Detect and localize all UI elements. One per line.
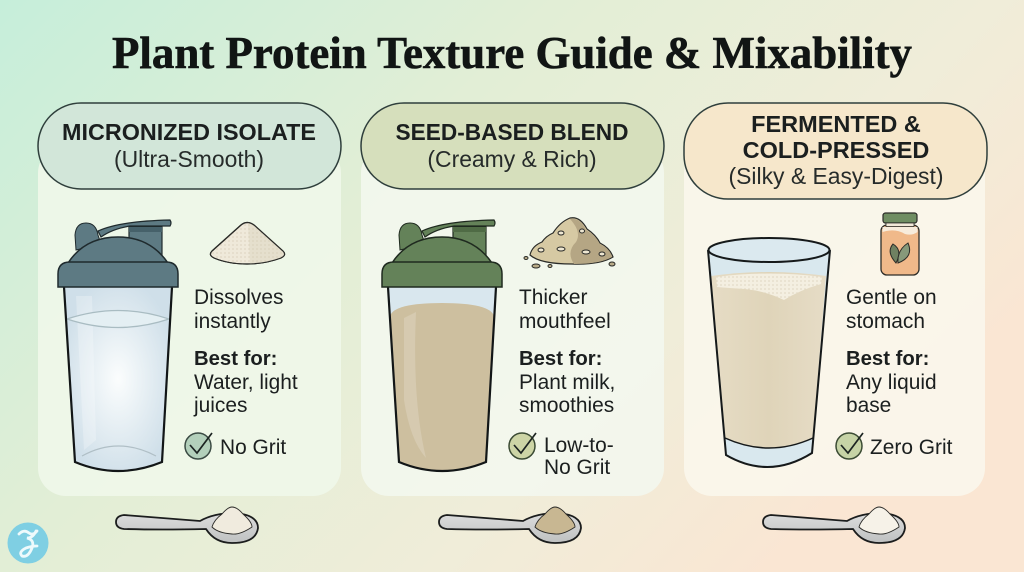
icon: fermented jar (881, 213, 919, 275)
heading pill: COLD-PRESSED (743, 137, 929, 163)
spoon: fine white powder (763, 507, 905, 543)
text: best for: Best for: (194, 348, 277, 370)
heading pill (38, 103, 341, 189)
text: dissolves instantly: Dissolves (194, 286, 283, 309)
text: gentle on stomach: stomach (846, 310, 925, 333)
icon: check badge (185, 433, 212, 459)
text: best for: Best for: (519, 348, 602, 370)
icon: check badge (509, 433, 536, 459)
heading pill (684, 103, 987, 199)
shaker bottle with plant milk (382, 220, 502, 471)
icon: white powder pile (210, 222, 285, 264)
spoon: tan powder (439, 507, 581, 543)
heading pill: FERMENTED & (751, 111, 921, 137)
shaker bottle with water (58, 220, 178, 471)
text: best for: Any liquid (846, 371, 937, 394)
text: low-to-no grit: Low-to- (544, 434, 614, 457)
panel background (361, 145, 664, 496)
panel: seed-based blend (361, 103, 664, 496)
text: best for: Best for: (846, 348, 929, 370)
text: best for: base (846, 394, 891, 417)
heading pill: SEED-BASED BLEND (396, 119, 628, 145)
heading pill: (Silky & Easy-Digest) (729, 163, 943, 189)
panel: fermented and cold-pressed (684, 103, 987, 496)
icon: check badge (836, 433, 863, 459)
text: no grit: No Grit (220, 436, 286, 459)
glass of silky shake (708, 238, 830, 467)
text: best for: smoothies (519, 394, 614, 417)
heading pill: (Ultra-Smooth) (114, 146, 264, 172)
panel background (684, 145, 985, 496)
text: best for: juices (193, 394, 247, 417)
text: thicker mouthfeel: Thicker (519, 286, 588, 309)
text: best for: Plant milk, (519, 371, 615, 394)
spoon: white powder (116, 507, 258, 543)
text: zero grit: Zero Grit (870, 436, 953, 459)
text: dissolves instantly: instantly (194, 310, 271, 333)
heading pill: (Creamy & Rich) (427, 146, 597, 172)
text: low-to-no grit: No Grit (544, 456, 610, 479)
text: best for: Water, light (194, 371, 298, 394)
heading pill (361, 103, 664, 189)
panel: micronized isolate (38, 103, 341, 496)
logo (8, 522, 48, 564)
heading pill: MICRONIZED ISOLATE (62, 119, 316, 145)
panel background (38, 145, 341, 496)
text: thicker mouthfeel: mouthfeel (519, 310, 611, 333)
text: gentle on stomach: Gentle on (846, 286, 937, 309)
title: Plant Protein Texture Guide & Mixability (112, 28, 912, 78)
icon: seed powder pile (524, 218, 615, 268)
